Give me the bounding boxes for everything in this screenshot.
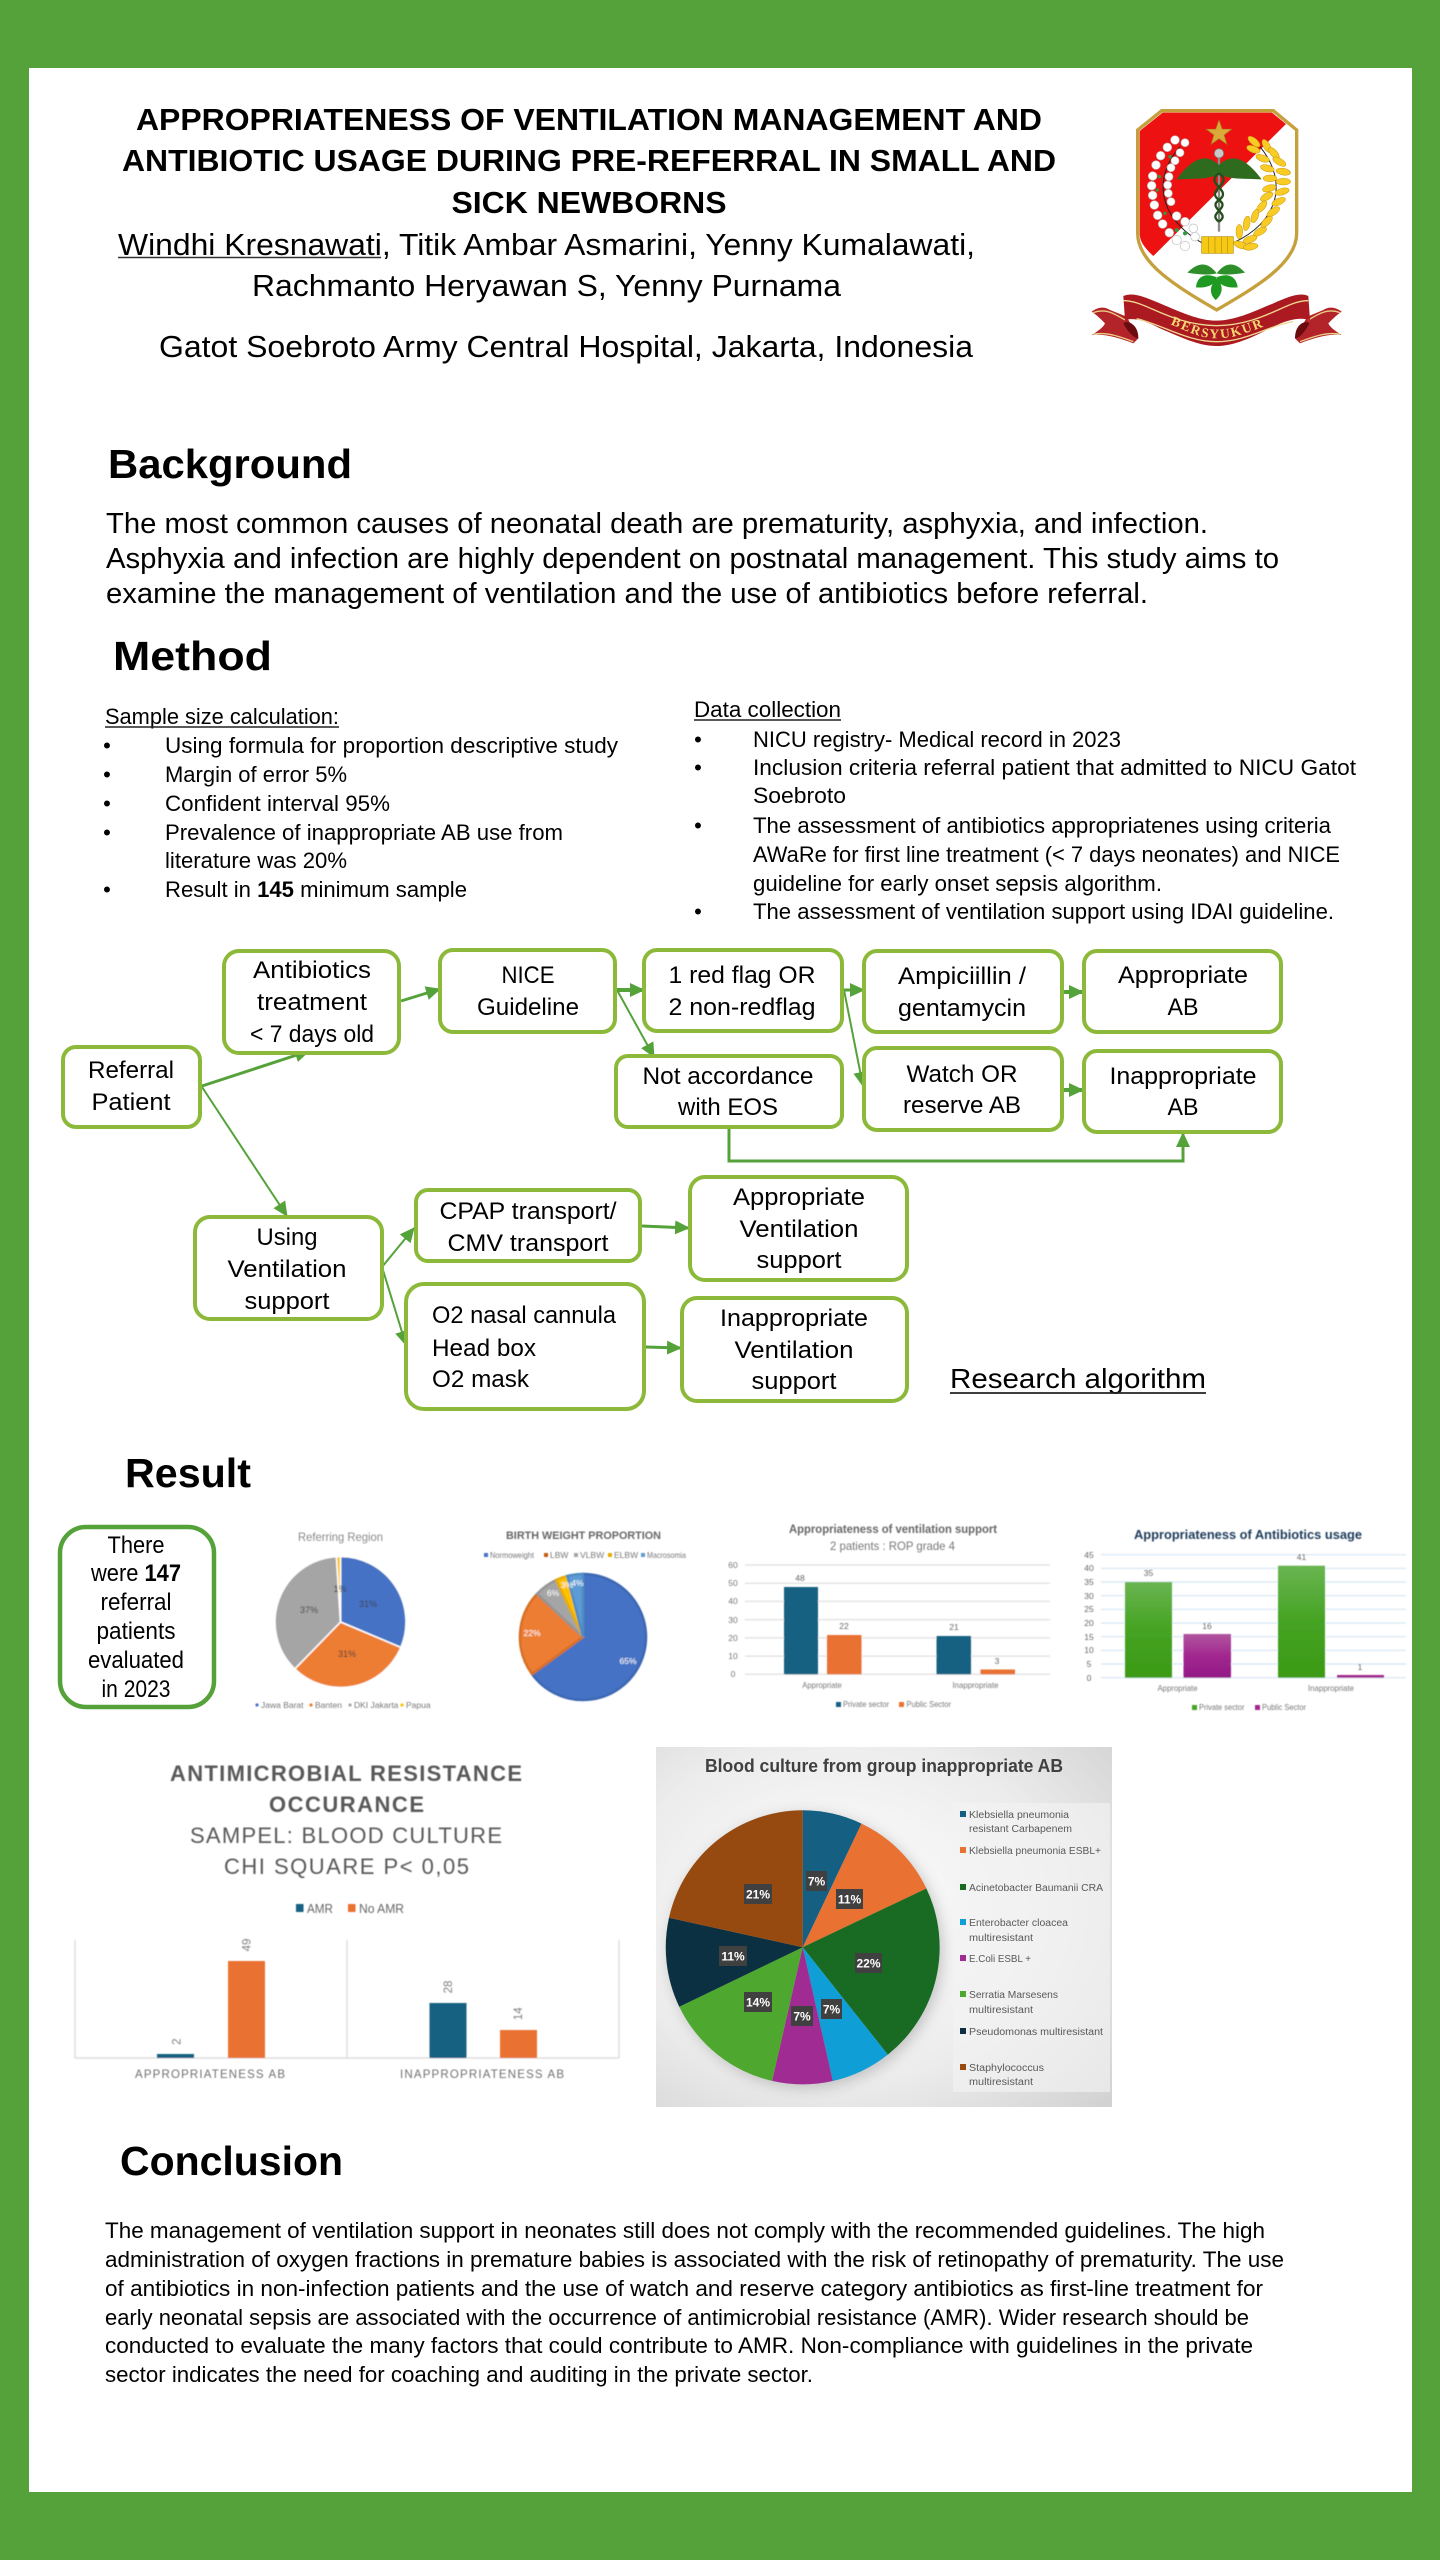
pie data labels: 14% bbox=[746, 1996, 770, 2010]
bar chart: Appropriateness of Antibiotics usage: 25 bbox=[1084, 1604, 1094, 1614]
method: sample size calculation: • bbox=[103, 820, 111, 845]
pie chart: Birth weight proportion: 6% bbox=[547, 1588, 560, 1598]
pie chart: Birth weight proportion: 4% bbox=[571, 1578, 584, 1588]
bar chart: Appropriateness of Antibiotics usage: Private sector bbox=[1199, 1702, 1245, 1712]
box: red flag criteria bbox=[644, 950, 842, 1031]
bar chart: Antimicrobial resistance occurance: APPROPRIATENESS AB bbox=[135, 2069, 285, 2081]
box: Appropriate AB: AB bbox=[1168, 994, 1198, 1021]
conclusion text block: administration of oxygen fractions in premature babies is associated with the risk of retinopathy of prematurity. The use bbox=[105, 2247, 1284, 2272]
legend: bacteria species: multiresistant bbox=[969, 1933, 1033, 1944]
caption: Research algorithm: Research algorithm bbox=[950, 1363, 1206, 1394]
box: O2 devices: Head box bbox=[432, 1335, 536, 1362]
bar chart: Appropriateness of Antibiotics usage: 35 bbox=[1144, 1568, 1153, 1578]
bar chart: Antimicrobial resistance occurance: ANTIMICROBIAL RESISTANCE bbox=[170, 1761, 522, 1786]
bar chart: Appropriateness of ventilation support: Private sector bbox=[843, 1699, 889, 1709]
pie data labels bbox=[719, 1871, 882, 2026]
pie chart: Birth weight proportion: VLBW bbox=[580, 1550, 604, 1560]
background text block bbox=[106, 508, 1279, 610]
bar chart: Appropriateness of Antibiotics usage: Public Sector bbox=[1262, 1702, 1306, 1712]
pie data labels: 7% bbox=[793, 2010, 811, 2024]
box: Appropriate Ventilation support: support bbox=[756, 1247, 842, 1274]
pie chart: Referring Region: Referring Region bbox=[298, 1530, 383, 1544]
conclusion text block bbox=[105, 2218, 1284, 2387]
method: sample size calculation: • bbox=[103, 877, 111, 902]
bar chart: Antimicrobial resistance occurance: 49 bbox=[242, 1939, 254, 1951]
box: Using Ventilation support: Ventilation bbox=[228, 1256, 346, 1283]
box: O2 devices: O2 nasal cannula bbox=[432, 1302, 617, 1329]
title bbox=[122, 102, 1056, 220]
bar chart: Appropriateness of ventilation support: Public Sector bbox=[906, 1699, 951, 1709]
bar chart: Appropriateness of Antibiotics usage: 10 bbox=[1084, 1645, 1094, 1655]
bar chart: Appropriateness of ventilation support: 30 bbox=[728, 1615, 738, 1625]
bar chart: Appropriateness of ventilation support: Inappropriate bbox=[952, 1680, 999, 1690]
bar chart: Antimicrobial resistance occurance: 14 bbox=[513, 2007, 525, 2020]
legend: bacteria species: Acinetobacter Baumanii CRA bbox=[969, 1883, 1103, 1894]
authors: Rachmanto Heryawan S, Yenny Purnama bbox=[252, 269, 841, 303]
title: APPROPRIATENESS OF VENTILATION MANAGEMENT AND bbox=[136, 102, 1042, 137]
arrows bbox=[202, 989, 1183, 1348]
method: sample size calculation: Prevalence of inappropriate AB use from bbox=[165, 820, 563, 845]
bar chart: Antimicrobial resistance occurance: SAMPEL: BLOOD CULTURE bbox=[190, 1823, 502, 1848]
bar chart: Appropriateness of Antibiotics usage: 30 bbox=[1084, 1591, 1094, 1601]
bar chart: Appropriateness of ventilation support: 2 patients : ROP grade 4 bbox=[830, 1539, 955, 1553]
bar chart: Appropriateness of Antibiotics usage: 41 bbox=[1297, 1552, 1306, 1562]
bar chart: Appropriateness of Antibiotics usage: 20 bbox=[1084, 1618, 1094, 1628]
bar chart: Appropriateness of Antibiotics usage: 16 bbox=[1202, 1621, 1212, 1631]
pie chart: Referring Region: 1% bbox=[333, 1584, 347, 1594]
box: Referral Patient: Referral bbox=[88, 1057, 174, 1084]
box: Appropriate Ventilation support: Appropriate bbox=[733, 1184, 865, 1211]
bar chart: Appropriateness of ventilation support: 48 bbox=[795, 1573, 805, 1583]
bar chart: Appropriateness of Antibiotics usage: Appropriateness of Antibiotics usage bbox=[1134, 1527, 1362, 1542]
box: Watch or reserve AB bbox=[864, 1048, 1062, 1130]
box: Referral Patient: Patient bbox=[92, 1089, 171, 1116]
pie chart: Birth weight proportion: 3% bbox=[561, 1580, 574, 1590]
bar chart: Antimicrobial resistance occurance: 28 bbox=[443, 1981, 455, 1993]
pie chart: Referring Region: 31% bbox=[338, 1649, 356, 1659]
bar chart: Appropriateness of Antibiotics usage: 35 bbox=[1084, 1577, 1094, 1587]
conclusion text block: The management of ventilation support in neonates still does not comply with the recommended guidelines. The high bbox=[105, 2218, 1265, 2243]
title: SICK NEWBORNS bbox=[452, 185, 726, 220]
method: data collection: AWaRe for first line treatment (< 7 days neonates) and NICE bbox=[753, 842, 1340, 867]
bar chart: Appropriateness of ventilation support bbox=[728, 1524, 1050, 1709]
method: sample size calculation: literature was 20% bbox=[165, 848, 347, 873]
callout: 147 referral patients bbox=[60, 1527, 214, 1707]
pie chart: Birth weight proportion: Normoweight bbox=[490, 1550, 535, 1560]
bar chart: Antimicrobial resistance occurance bbox=[75, 1761, 619, 2081]
box: Using Ventilation support: Using bbox=[256, 1224, 318, 1251]
box: Appropriate Ventilation support: Ventilation bbox=[740, 1216, 858, 1243]
bar chart: Appropriateness of Antibiotics usage: 5 bbox=[1087, 1659, 1092, 1669]
conclusion text block: conducted to evaluate the many factors that could contribute to AMR. Non-compliance with guidelines in the private bbox=[105, 2333, 1253, 2358]
box: Watch or reserve AB: Watch OR bbox=[906, 1061, 1018, 1088]
legend: bacteria species: Pseudomonas multiresistant bbox=[969, 2027, 1103, 2038]
pie chart: Birth weight proportion: ELBW bbox=[614, 1550, 638, 1560]
box: Antibiotics treatment bbox=[224, 951, 399, 1053]
pie chart: Referring Region: Papua bbox=[406, 1700, 431, 1710]
pie chart: Birth weight proportion: LBW bbox=[550, 1550, 568, 1560]
method: data collection: guideline for early onset sepsis algorithm. bbox=[753, 871, 1162, 896]
callout: 147 referral patients: There bbox=[108, 1532, 164, 1559]
pie chart: Birth weight proportion: Macrosomia bbox=[647, 1550, 686, 1560]
bar chart: Appropriateness of Antibiotics usage: Inappropriate bbox=[1308, 1683, 1354, 1693]
box: Antibiotics treatment: Antibiotics bbox=[253, 957, 371, 984]
box: Referral Patient bbox=[63, 1047, 200, 1127]
box: Not accordance with EOS: with EOS bbox=[677, 1094, 778, 1121]
box: red flag criteria: 1 red flag OR bbox=[668, 962, 816, 989]
box: Inappropriate AB: AB bbox=[1168, 1094, 1198, 1121]
conclusion text block: early neonatal sepsis are associated with the occurrence of antimicrobial resistance (AMR). Wider research should be bbox=[105, 2305, 1249, 2330]
pie chart panel: Blood culture from group inappropriate AB: Blood culture from group inappropriate AB bbox=[705, 1756, 1063, 1776]
pie chart: Birth weight proportion: 65% bbox=[619, 1656, 637, 1666]
legend: bacteria species bbox=[953, 1803, 1110, 2092]
method: sample size calculation: Result in 145 minimum sample bbox=[165, 877, 467, 902]
bar chart: Antimicrobial resistance occurance: 2 bbox=[172, 2038, 184, 2045]
method: data collection: The assessment of antibiotics appropriatenes using criteria bbox=[753, 813, 1332, 838]
method: data collection: • bbox=[694, 727, 702, 752]
method: data collection: The assessment of ventilation support using IDAI guideline. bbox=[753, 899, 1334, 924]
bar chart: Antimicrobial resistance occurance: No AMR bbox=[359, 1901, 404, 1916]
legend: bacteria species: Klebsiella pneumonia ESBL+ bbox=[969, 1846, 1101, 1857]
legend: bacteria species: Serratia Marsesens bbox=[969, 1990, 1058, 2001]
conclusion text block: sector indicates the need for coaching and auditing in the private sector. bbox=[105, 2362, 813, 2387]
method: sample size calculation: Sample size calculation: bbox=[105, 704, 339, 729]
box: O2 devices: O2 mask bbox=[432, 1366, 530, 1393]
box: Watch or reserve AB: reserve AB bbox=[903, 1092, 1021, 1119]
box: Inappropriate Ventilation support bbox=[682, 1298, 907, 1401]
pie chart: Birth weight proportion: 22% bbox=[523, 1628, 541, 1638]
bar chart: Appropriateness of Antibiotics usage: 45 bbox=[1084, 1550, 1094, 1560]
pie chart: Referring Region: DKI Jakarta bbox=[354, 1700, 399, 1710]
box: Not accordance with EOS: Not accordance bbox=[642, 1063, 814, 1090]
conclusion text block: of antibiotics in non-infection patients and the use of watch and reserve category antibiotics as first-line treatment for bbox=[105, 2276, 1263, 2301]
legend: bacteria species: Enterobacter cloacea bbox=[969, 1918, 1068, 1929]
background text block: Asphyxia and infection are highly dependent on postnatal management. This study aims to bbox=[106, 543, 1279, 575]
box: Inappropriate Ventilation support: Ventilation bbox=[734, 1337, 854, 1364]
pie chart: Birth weight proportion bbox=[484, 1530, 686, 1700]
method: data collection: Soebroto bbox=[753, 783, 846, 808]
authors: Windhi Kresnawati, Titik Ambar Asmarini, Yenny Kumalawati, bbox=[118, 228, 975, 262]
bar chart: Antimicrobial resistance occurance: CHI SQUARE P< 0,05 bbox=[224, 1854, 469, 1879]
box: Inappropriate Ventilation support: support bbox=[752, 1368, 837, 1395]
pie data labels: 21% bbox=[746, 1888, 770, 1902]
heading: Method: Method bbox=[113, 633, 272, 679]
heading: Background: Background bbox=[108, 441, 352, 487]
box: Appropriate AB: Appropriate bbox=[1118, 962, 1248, 989]
legend: bacteria species: resistant Carbapenem bbox=[969, 1824, 1072, 1835]
box: Inappropriate AB bbox=[1084, 1051, 1281, 1132]
method: sample size calculation bbox=[103, 704, 618, 902]
bar chart: Appropriateness of ventilation support: 50 bbox=[728, 1578, 738, 1588]
method: data collection: • bbox=[694, 899, 702, 924]
method: sample size calculation: • bbox=[103, 733, 111, 758]
bar chart: Appropriateness of ventilation support: 0 bbox=[731, 1669, 736, 1679]
legend: bacteria species: multiresistant bbox=[969, 2077, 1033, 2088]
heading: Conclusion: Conclusion bbox=[120, 2138, 343, 2184]
method: sample size calculation: Using formula for proportion descriptive study bbox=[165, 733, 618, 758]
bar chart: Appropriateness of ventilation support: 20 bbox=[728, 1633, 738, 1643]
legend: bacteria species: Klebsiella pneumonia bbox=[969, 1810, 1069, 1821]
callout: 147 referral patients: evaluated bbox=[88, 1647, 184, 1674]
bar chart: Appropriateness of Antibiotics usage: 40 bbox=[1084, 1563, 1094, 1573]
heading: Result: Result bbox=[125, 1450, 251, 1496]
bar chart: Appropriateness of ventilation support: Appropriateness of ventilation support bbox=[789, 1524, 997, 1536]
box: O2 devices bbox=[406, 1284, 644, 1409]
legend: bacteria species: Staphylococcus bbox=[969, 2063, 1044, 2074]
legend: bacteria species: multiresistant bbox=[969, 2005, 1033, 2016]
method: data collection: • bbox=[694, 813, 702, 838]
box: CPAP CMV transport: CPAP transport/ bbox=[440, 1198, 617, 1225]
callout: 147 referral patients: were 147 bbox=[90, 1560, 181, 1587]
bar chart: Appropriateness of ventilation support: 60 bbox=[728, 1560, 738, 1570]
callout: 147 referral patients: referral bbox=[100, 1589, 172, 1616]
box: Inappropriate Ventilation support: Inappropriate bbox=[720, 1305, 868, 1332]
pie chart: Referring Region: 37% bbox=[300, 1605, 318, 1615]
box: Inappropriate AB: Inappropriate bbox=[1110, 1063, 1256, 1090]
box: Appropriate AB bbox=[1084, 951, 1281, 1032]
bar chart: Antimicrobial resistance occurance: OCCURANCE bbox=[269, 1792, 424, 1817]
method: data collection: NICU registry- Medical record in 2023 bbox=[753, 727, 1121, 752]
method: sample size calculation: Confident interval 95% bbox=[165, 791, 390, 816]
box: Antibiotics treatment: < 7 days old bbox=[250, 1021, 374, 1048]
box: Using Ventilation support: support bbox=[244, 1288, 330, 1315]
box: Appropriate Ventilation support bbox=[690, 1177, 907, 1280]
legend: bacteria species: E.Coli ESBL + bbox=[969, 1954, 1031, 1965]
method: sample size calculation: • bbox=[103, 762, 111, 787]
flowchart: research algorithm bbox=[63, 950, 1281, 1409]
pie chart: Referring Region: 31% bbox=[359, 1599, 377, 1609]
bar chart: Appropriateness of ventilation support: 10 bbox=[728, 1651, 738, 1661]
title: ANTIBIOTIC USAGE DURING PRE-REFERRAL IN SMALL AND bbox=[122, 143, 1056, 178]
authors bbox=[118, 228, 975, 303]
pie data labels: 11% bbox=[838, 1892, 862, 1906]
pie data labels: 7% bbox=[823, 2002, 841, 2016]
bar chart: Appropriateness of Antibiotics usage: 0 bbox=[1087, 1673, 1092, 1683]
bar chart: Antimicrobial resistance occurance: AMR bbox=[307, 1901, 333, 1916]
bar chart: Appropriateness of ventilation support: Appropriate bbox=[802, 1680, 842, 1690]
box: Antibiotics treatment: treatment bbox=[257, 989, 367, 1016]
box: NICE Guideline: NICE bbox=[502, 962, 554, 989]
pie chart: Referring Region: Jawa Barat bbox=[261, 1700, 304, 1710]
method: data collection bbox=[694, 697, 1356, 924]
box: red flag criteria: 2 non-redflag bbox=[668, 994, 816, 1021]
pie data labels: 11% bbox=[721, 1950, 745, 1964]
box: Using Ventilation support bbox=[195, 1217, 382, 1319]
pie data labels: 22% bbox=[856, 1956, 881, 1970]
box: Ampicillin gentamycin bbox=[864, 951, 1062, 1032]
bar chart: Antimicrobial resistance occurance: INAPPROPRIATENESS AB bbox=[400, 2069, 564, 2081]
bar chart: Appropriateness of Antibiotics usage: Appropriate bbox=[1158, 1683, 1198, 1693]
box: CPAP CMV transport bbox=[416, 1190, 640, 1261]
background text block: The most common causes of neonatal death are prematurity, asphyxia, and infection. bbox=[106, 508, 1208, 540]
bar chart: Appropriateness of ventilation support: 22 bbox=[839, 1621, 849, 1631]
bar chart: Appropriateness of ventilation support: 21 bbox=[949, 1622, 959, 1632]
box: Ampicillin gentamycin: Ampiciillin / bbox=[898, 963, 1026, 990]
method: sample size calculation: Margin of error 5% bbox=[165, 762, 347, 787]
box: Ampicillin gentamycin: gentamycin bbox=[898, 995, 1026, 1022]
bar chart: Appropriateness of Antibiotics usage: 1 bbox=[1358, 1662, 1363, 1672]
box: NICE Guideline: Guideline bbox=[477, 994, 579, 1021]
method: sample size calculation: • bbox=[103, 791, 111, 816]
pie data labels: 7% bbox=[808, 1874, 826, 1888]
box: CPAP CMV transport: CMV transport bbox=[448, 1230, 609, 1257]
logo: Kesehatan crest with Bersyukur ribbon: BERSYUKUR bbox=[1170, 316, 1264, 338]
bar chart: Appropriateness of ventilation support: 3 bbox=[995, 1656, 1000, 1666]
bar chart: Appropriateness of ventilation support: 40 bbox=[728, 1596, 738, 1606]
pie chart: Birth weight proportion: BIRTH WEIGHT PROPORTION bbox=[506, 1530, 661, 1542]
background text block: examine the management of ventilation and the use of antibiotics before referral. bbox=[106, 578, 1148, 610]
method: data collection: • bbox=[694, 755, 702, 780]
callout: 147 referral patients: patients bbox=[96, 1618, 176, 1645]
affiliation: Gatot Soebroto Army Central Hospital, Jakarta, Indonesia bbox=[159, 330, 973, 364]
pie chart: Referring Region: Banten bbox=[315, 1700, 342, 1710]
callout: 147 referral patients: in 2023 bbox=[102, 1676, 170, 1703]
bar chart: Appropriateness of Antibiotics usage: 15 bbox=[1084, 1632, 1094, 1642]
box: NICE Guideline bbox=[440, 950, 615, 1032]
logo: Kesehatan crest with Bersyukur ribbon bbox=[1092, 109, 1342, 346]
method: data collection: Data collection bbox=[694, 697, 841, 722]
pie chart: Referring Region bbox=[255, 1530, 431, 1710]
method: data collection: Inclusion criteria referral patient that admitted to NICU Gatot bbox=[753, 755, 1356, 780]
bar chart: Appropriateness of Antibiotics usage bbox=[1084, 1527, 1406, 1712]
pie chart panel: Blood culture from group inappropriate AB bbox=[656, 1747, 1112, 2107]
box: Not accordance with EOS bbox=[616, 1056, 842, 1127]
